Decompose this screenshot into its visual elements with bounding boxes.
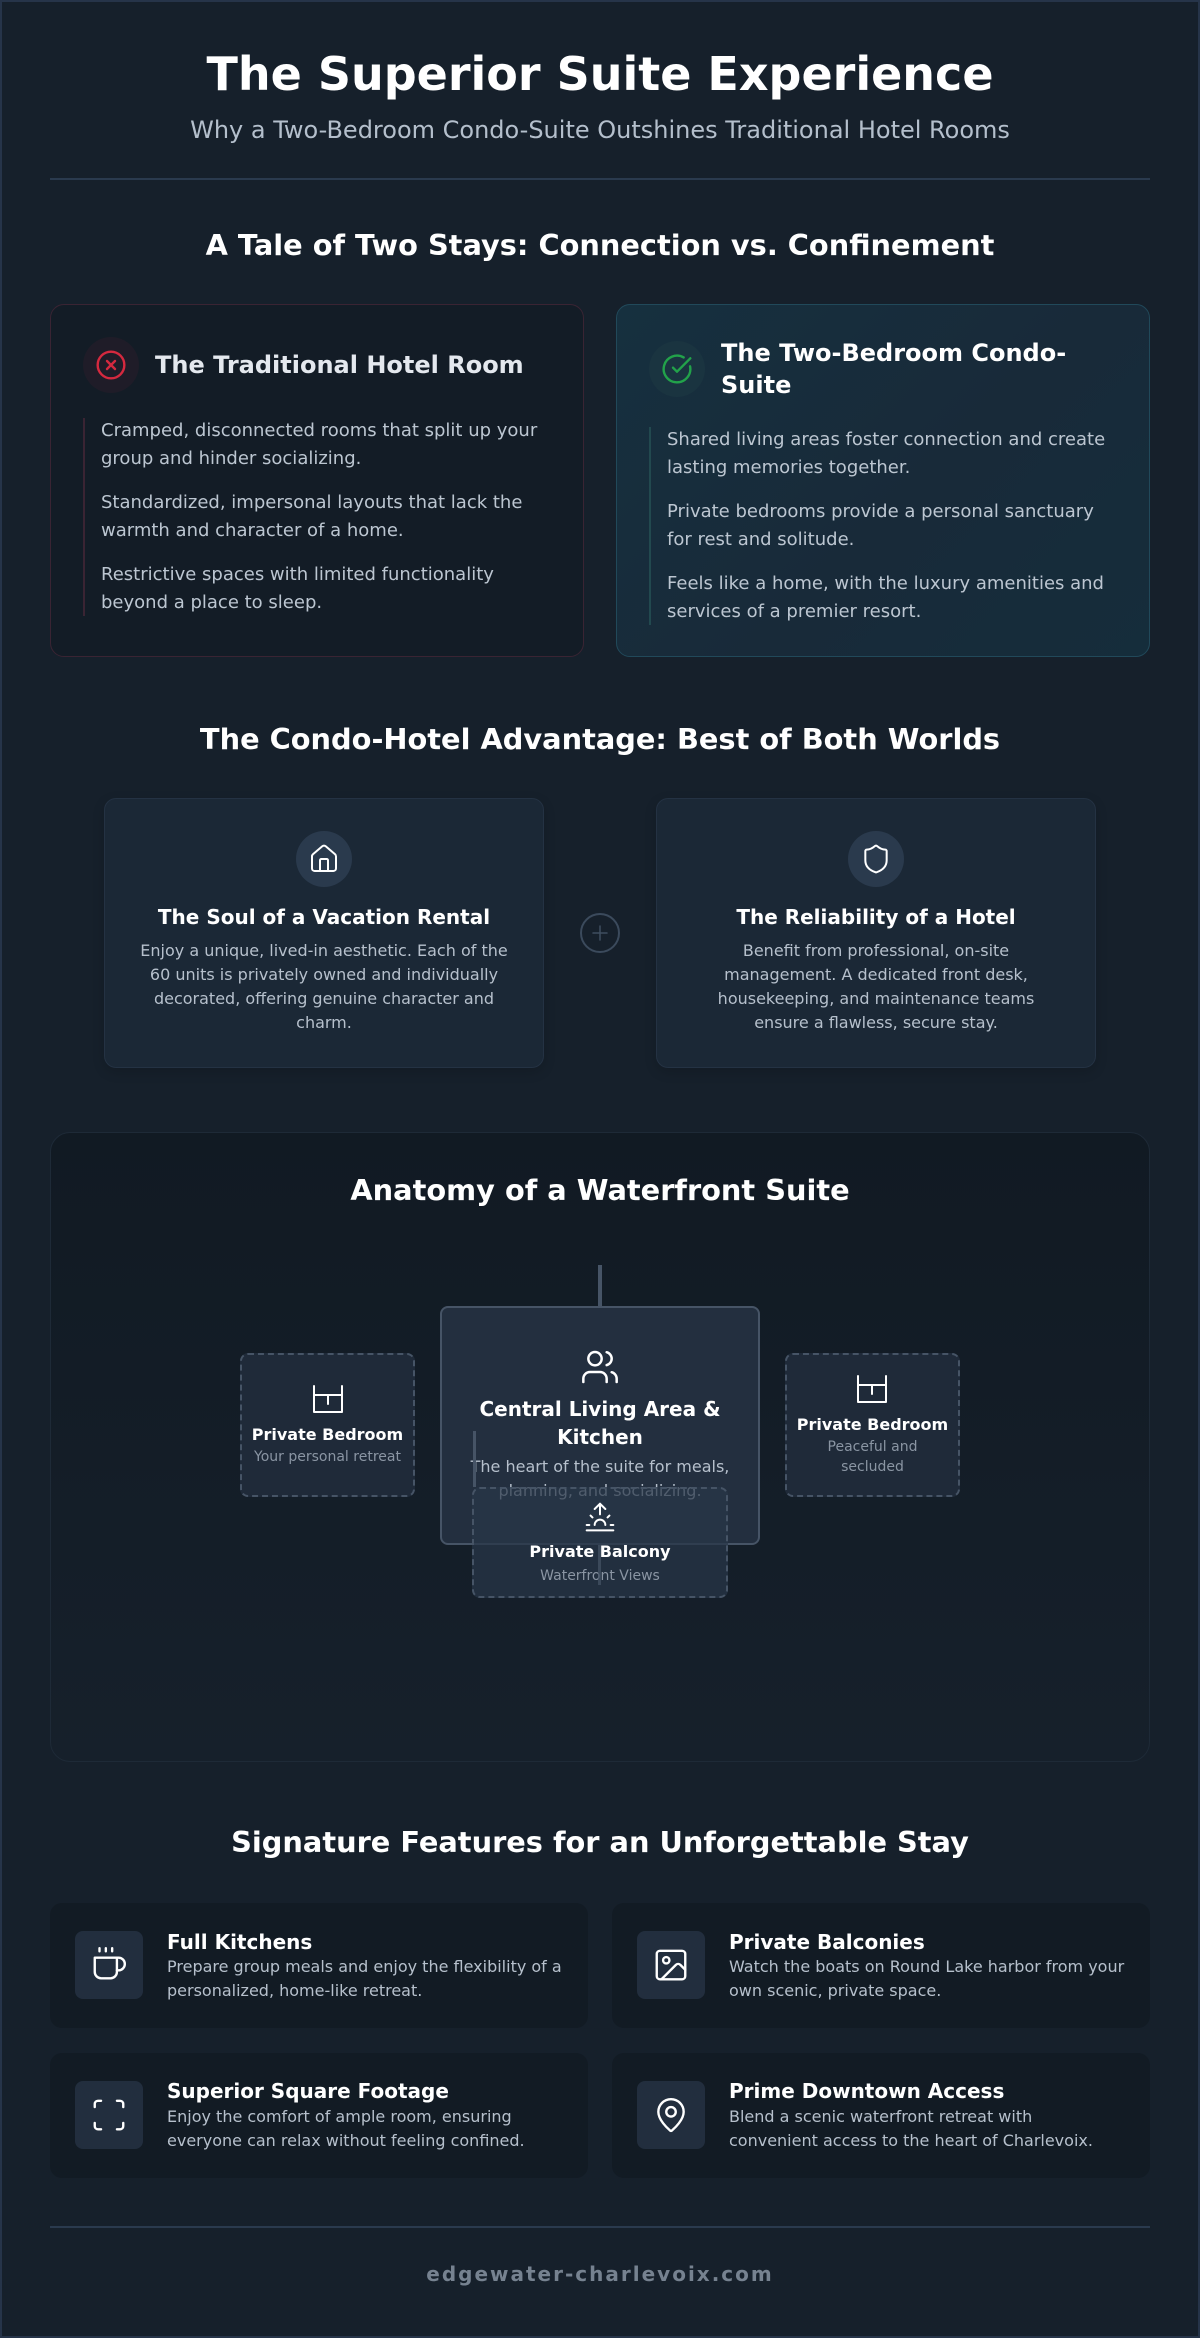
feature: prime downtown access: convenient access to the heart of Charlevoix. [729,2131,1093,2150]
footer: edgewater-charlevoix.com [426,2262,774,2286]
central text: The heart of the suite for meals, [471,1457,729,1476]
list: lasting memories together. [667,457,910,478]
title: The Superior Suite Experience [206,47,994,101]
panel: soul of a vacation rental: The Soul of a Vacation Rental [158,905,490,929]
feature: superior square footage: everyone can relax without feeling confined. [167,2131,525,2150]
feature: prime downtown access: Blend a scenic waterfront retreat with [729,2107,1032,2126]
central text [470,1457,729,1500]
panel: soul of a vacation rental: Enjoy a unique, lived-in aesthetic. Each of the [140,941,508,960]
connector left [473,1431,476,1487]
feature: full kitchens: personalized, home-like retreat. [167,1981,422,2000]
feature: full kitchens [50,1903,588,2028]
list: group and hinder socializing. [101,448,361,469]
list: Private bedrooms provide a personal sanctuary [667,501,1094,522]
icon: maximize [75,2081,143,2149]
list: Shared living areas foster connection and create [667,429,1105,450]
panel: anatomy of a waterfront suite [50,1132,1150,1762]
icon: home [296,831,352,887]
icon: x circle [83,337,139,393]
card heading: The Traditional Hotel Room [155,351,524,379]
card heading: Suite [721,371,791,399]
card heading: The Two-Bedroom Condo- [721,339,1066,367]
room: central living area [440,1306,760,1545]
room: private balcony: Waterfront Views [540,1568,660,1584]
panel: reliability of a hotel: management. A dedicated front desk, [724,965,1028,984]
list: Restrictive spaces with limited functionality [101,564,494,585]
heading: Anatomy of a Waterfront Suite [350,1173,850,1207]
panel: reliability of a hotel: Benefit from professional, on-site [743,941,1009,960]
icon: bed [857,1375,887,1403]
heading: condo-hotel advantage: The Condo-Hotel Advantage: Best of Both Worlds [200,722,1000,756]
room: left bedroom [240,1353,415,1497]
feature: private balconies: Private Balconies [729,1930,925,1954]
central heading [479,1397,721,1449]
central heading: Central Living Area & [479,1397,721,1421]
feature: superior square footage: Superior Square Footage [167,2079,449,2103]
feature: superior square footage [50,2053,588,2178]
heading: tale of two stays: A Tale of Two Stays: Connection vs. Confinement [206,228,994,262]
list: Feels like a home, with the luxury amenities and [667,573,1104,594]
icon: sunrise [586,1502,614,1532]
panel: reliability of a hotel: The Reliability of a Hotel [736,905,1016,929]
panel: soul of a vacation rental: 60 units is privately owned and individually [150,965,498,984]
room: right bedroom: Peaceful and [828,1439,917,1455]
icon: image [637,1931,705,1999]
panel: reliability of a hotel [656,798,1096,1068]
icon: check circle [649,341,705,397]
list: Cramped, disconnected rooms that split up your [101,420,537,441]
room: private balcony [472,1487,728,1598]
central text: planning, and socializing. [498,1481,702,1500]
connector bottom [598,1545,601,1585]
card heading [721,339,1066,399]
feature: full kitchens: Prepare group meals and enjoy the flexibility of a [167,1957,562,1976]
feature: full kitchens: Full Kitchens [167,1930,312,1954]
icon: shield [848,831,904,887]
list: warmth and character of a home. [101,520,404,541]
panel: soul of a vacation rental [104,798,544,1068]
list: Standardized, impersonal layouts that lack the [101,492,522,513]
icon: bed [313,1385,343,1413]
room: right bedroom [785,1353,960,1497]
subtitle: Why a Two-Bedroom Condo-Suite Outshines Traditional Hotel Rooms [190,116,1010,144]
list [101,420,538,613]
icon: plus [580,913,620,953]
feature: prime downtown access [612,2053,1150,2178]
list: beyond a place to sleep. [101,592,322,613]
feature: private balconies [612,1903,1150,2028]
list: for rest and solitude. [667,529,854,550]
room: right bedroom: Private Bedroom [797,1415,948,1434]
feature: private balconies: own scenic, private space. [729,1981,941,2000]
panel: traditional hotel room [50,304,584,657]
feature: private balconies: Watch the boats on Round Lake harbor from your [729,1957,1124,1976]
icon: map pin [637,2081,705,2149]
panel: soul of a vacation rental: decorated, offering genuine character and [154,989,494,1008]
panel: two-bedroom condo-suite [616,304,1150,657]
icon: coffee [75,1931,143,1999]
icon: users [582,1350,618,1384]
panel: reliability of a hotel: ensure a flawless, secure stay. [754,1013,998,1032]
heading: signature features: Signature Features for an Unforgettable Stay [231,1825,969,1859]
list [667,429,1105,622]
room: private balcony: Private Balcony [529,1542,671,1561]
connector top [598,1265,602,1306]
room: left bedroom: Your personal retreat [254,1449,401,1465]
room: right bedroom: secluded [841,1459,904,1475]
room: left bedroom: Private Bedroom [252,1425,403,1444]
central heading: Kitchen [557,1425,643,1449]
panel: reliability of a hotel: housekeeping, and maintenance teams [718,989,1034,1008]
list: services of a premier resort. [667,601,921,622]
panel: soul of a vacation rental: charm. [296,1013,352,1032]
feature: superior square footage: Enjoy the comfort of ample room, ensuring [167,2107,512,2126]
feature: prime downtown access: Prime Downtown Access [729,2079,1004,2103]
